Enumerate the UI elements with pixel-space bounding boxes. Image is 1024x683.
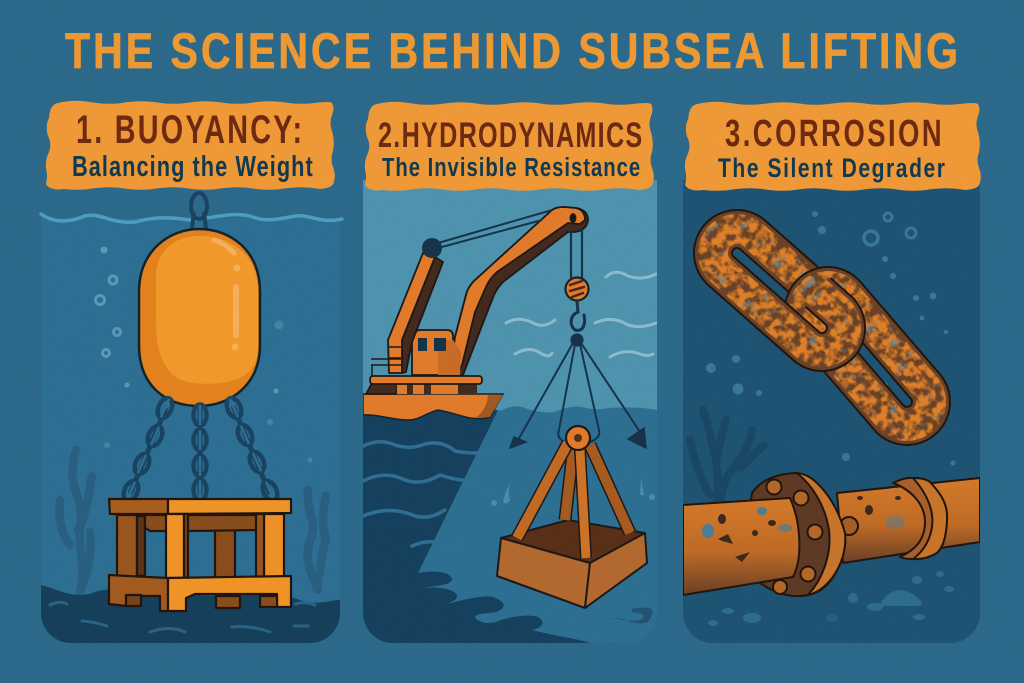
surface line — [41, 214, 342, 222]
pipe collar — [893, 478, 947, 559]
chain link two — [794, 276, 941, 436]
crane — [366, 207, 588, 394]
panel: buoyancy — [41, 193, 342, 643]
top chain — [191, 193, 207, 229]
chain link one — [703, 219, 856, 362]
title: THE SCIENCE BEHIND SUBSEA LIFTING — [65, 23, 958, 79]
left pipe section — [683, 498, 799, 595]
panel 2 water — [363, 180, 657, 643]
panel: corrosion — [46, 100, 981, 643]
bubbles — [96, 246, 312, 462]
banner 1 — [46, 101, 335, 190]
banner 3 heading: 3.CORROSION — [725, 113, 942, 155]
chain link one front arc — [762, 271, 856, 362]
sea — [496, 406, 657, 415]
panel 1 water — [41, 218, 340, 643]
lifting frame — [109, 499, 291, 611]
rails — [371, 359, 401, 376]
banner 2 subheading: The Invisible Resistance — [382, 153, 640, 182]
flange rim — [797, 473, 845, 595]
banner 2 — [365, 102, 654, 191]
seaweed — [59, 450, 326, 592]
debris — [491, 478, 655, 506]
short arm — [402, 257, 443, 373]
seabed — [41, 585, 340, 643]
flange disc — [745, 473, 845, 596]
bubbles — [706, 211, 956, 466]
chain centre — [194, 404, 206, 500]
panel 3 water — [683, 180, 980, 643]
banner 1 heading: 1. BUOYANCY: — [76, 107, 302, 152]
chain left — [121, 396, 175, 503]
banner 2 heading: 2.HYDRODYNAMICS — [378, 116, 642, 155]
dark hull shadow — [363, 410, 590, 643]
banner 3 — [685, 102, 981, 191]
cab — [412, 330, 453, 375]
seaweed — [690, 410, 764, 505]
wave lines — [363, 440, 478, 548]
main boom — [450, 207, 588, 375]
deck — [370, 376, 482, 384]
deckhouse base — [366, 383, 397, 394]
ship hull — [363, 394, 503, 420]
lifted frame — [497, 426, 647, 608]
banner 1 subheading: Balancing the Weight — [72, 151, 313, 183]
banner 3 subheading: The Silent Degrader — [718, 154, 945, 184]
rocks — [708, 571, 954, 626]
boom cables — [438, 210, 552, 248]
hoist and rigging — [510, 230, 646, 448]
buoy — [139, 229, 260, 406]
pipe rust texture — [702, 496, 905, 562]
right pipe section — [837, 478, 980, 563]
flange bolts — [766, 480, 822, 594]
rear bolt — [840, 517, 858, 535]
panel: hydrodynamics — [363, 180, 657, 643]
chain right — [224, 396, 280, 503]
